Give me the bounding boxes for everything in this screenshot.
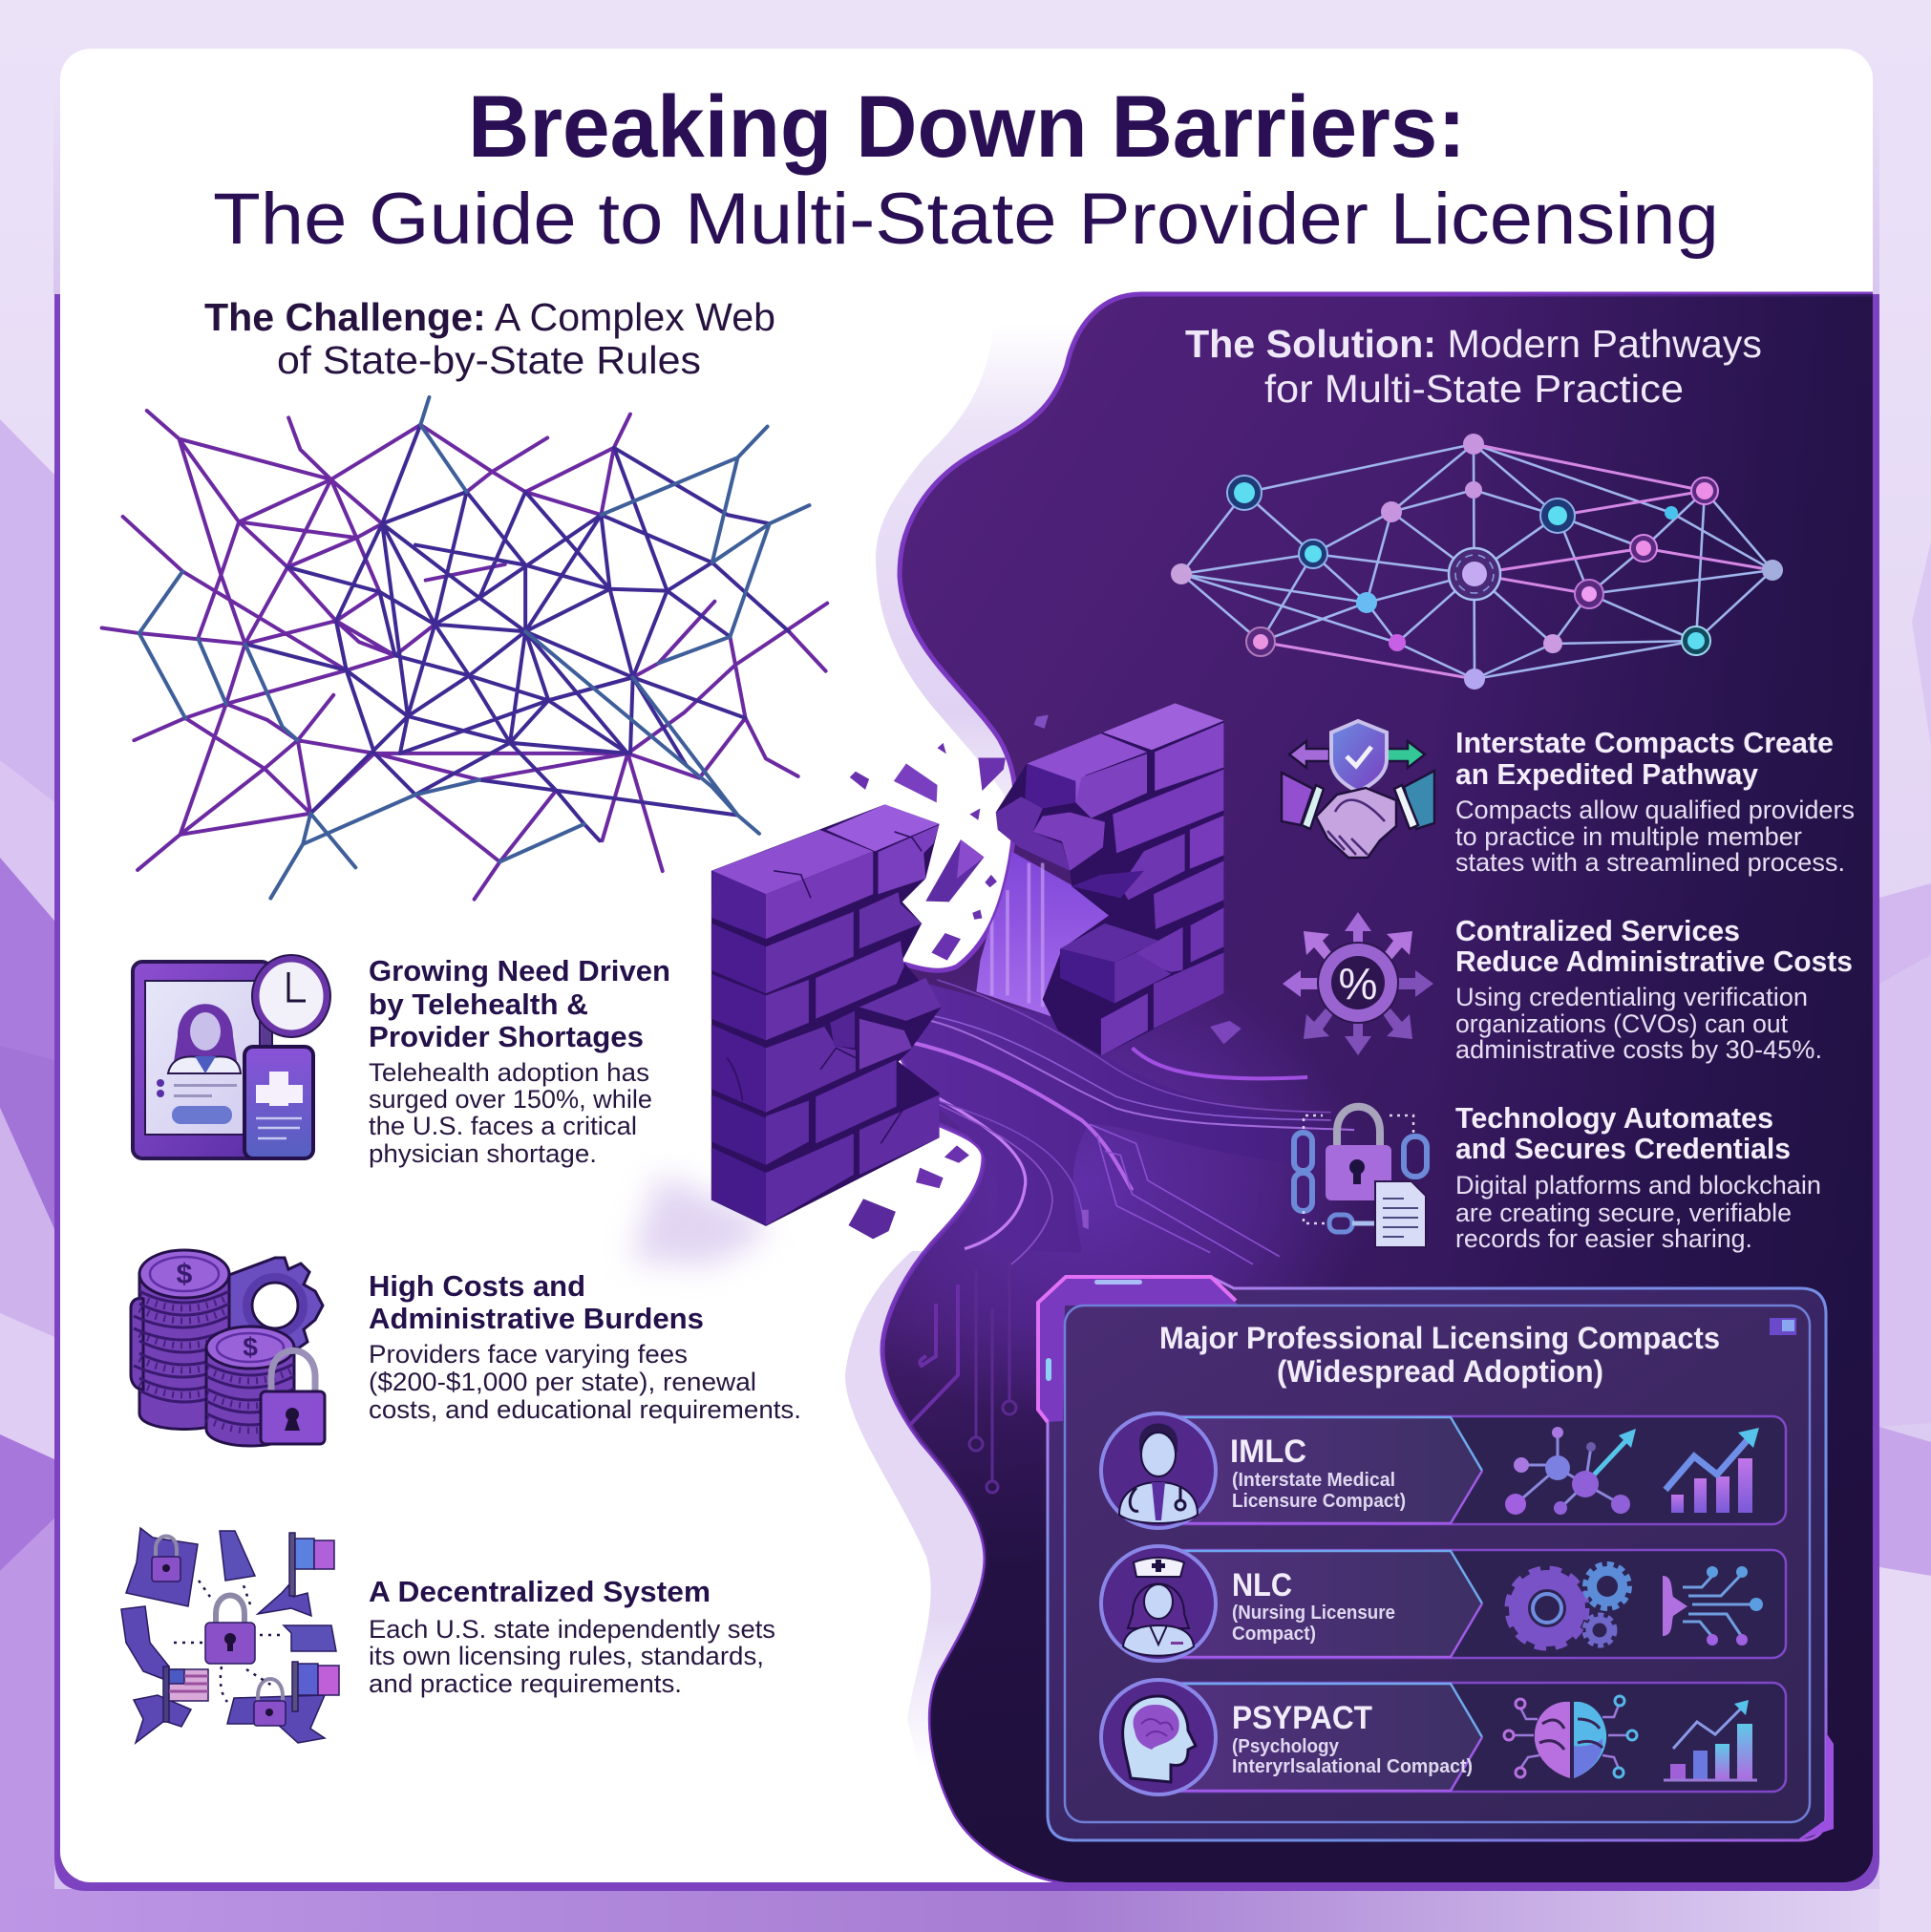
- panel heading: [1159, 1321, 1720, 1389]
- icon: percent with radiating arrows: %: [1339, 959, 1377, 1008]
- row: NLC: NLC: [1232, 1567, 1292, 1603]
- icon: handshake and shield: [1282, 721, 1434, 858]
- icon: percent with radiating arrows: [1283, 912, 1433, 1055]
- text: technology automates: are creating secure, verifiable: [1455, 1199, 1792, 1227]
- row: NLC: (Nursing Licensure: [1232, 1603, 1395, 1624]
- text: high costs: ($200-$1,000 per state), renewal: [369, 1368, 756, 1396]
- title: Breaking Down Barriers:: [468, 78, 1466, 176]
- icon: circuit connections: [1663, 1566, 1763, 1645]
- network diagram of modern pathways: [1171, 434, 1783, 690]
- floor shadow under wall: [630, 1175, 764, 1265]
- row: IMLC: (Interstate Medical: [1232, 1470, 1395, 1491]
- text: centralized services: Contralized Services: [1455, 914, 1740, 947]
- icon: decentralized state map with locks and flags: [121, 1528, 339, 1743]
- text: technology automates: records for easier sharing.: [1455, 1224, 1752, 1253]
- text: growing need: Growing Need Driven: [369, 954, 670, 987]
- tangled web chart of state rules: [102, 397, 827, 900]
- row: PSYPACT: [1101, 1680, 1786, 1794]
- icon: coin stacks, gear and lock: $: [177, 1259, 193, 1290]
- text: technology automates: Technology Automates: [1455, 1101, 1773, 1135]
- icon: bar chart with trend: [1664, 1700, 1757, 1780]
- dark solution panel wave: [793, 294, 1875, 1882]
- heading: the solution: for Multi-State Practice: [1264, 367, 1684, 411]
- text: decentralized system: A Decentralized System: [369, 1575, 711, 1608]
- lavender wave halo upper: [876, 353, 1068, 796]
- heading: the solution: The Solution: Modern Pathways: [1185, 322, 1762, 366]
- text: high costs: Administrative Burdens: [369, 1302, 704, 1335]
- text: centralized services: Using credentialing verification: [1455, 983, 1808, 1011]
- road and glowing opening behind broken wall: [899, 851, 1369, 1264]
- text: decentralized system: its own licensing rules, standards,: [369, 1642, 764, 1670]
- flying brick fragments: [848, 715, 1241, 1239]
- text: technology automates: [1455, 1101, 1821, 1253]
- row: PSYPACT: Interyrlsalational Compact): [1232, 1756, 1473, 1777]
- panel frame: [1038, 1277, 1834, 1841]
- panel heading: Major Professional Licensing Compacts: [1159, 1321, 1720, 1355]
- row: PSYPACT: PSYPACT: [1232, 1700, 1372, 1736]
- panel: major professional licensing compacts: [1038, 1277, 1834, 1841]
- text: growing need: surged over 150%, while: [369, 1085, 652, 1114]
- text: high costs: Providers face varying fees: [369, 1340, 688, 1369]
- heading: the challenge: The Challenge: A Complex Web: [204, 295, 775, 339]
- text: growing need: physician shortage.: [369, 1139, 597, 1168]
- text: decentralized system: and practice requirements.: [369, 1669, 682, 1698]
- icon: coin stacks, gear and lock: $: [243, 1332, 258, 1362]
- text: high costs: costs, and educational requirements.: [369, 1395, 801, 1424]
- text: interstate compacts: Compacts allow qualified providers: [1455, 796, 1855, 824]
- row: NLC: Compact): [1232, 1624, 1316, 1645]
- row: NLC: [1101, 1546, 1786, 1661]
- text: centralized services: Reduce Administrative Costs: [1455, 945, 1853, 978]
- circuit traces lower: [907, 1261, 1016, 1493]
- text: interstate compacts: an Expedited Pathway: [1455, 757, 1759, 791]
- panel heading: (Widespread Adoption): [1277, 1354, 1603, 1389]
- text: growing need: Telehealth adoption has: [369, 1058, 649, 1087]
- icon: telehealth tablet, clock and phone: [133, 955, 330, 1158]
- text: interstate compacts: to practice in multiple member: [1455, 822, 1802, 851]
- title: The Guide to Multi-State Provider Licensing: [213, 179, 1719, 260]
- text: growing need: Provider Shortages: [369, 1020, 644, 1053]
- text: centralized services: [1455, 914, 1853, 1064]
- text: decentralized system: Each U.S. state independently sets: [369, 1615, 775, 1644]
- text: high costs: [369, 1269, 801, 1424]
- row: IMLC: IMLC: [1230, 1433, 1306, 1470]
- title: [213, 78, 1719, 260]
- text: interstate compacts: states with a streamlined process.: [1455, 848, 1845, 877]
- broken brick wall: [711, 703, 1241, 1239]
- icon: network with arrow: [1505, 1427, 1636, 1515]
- row: IMLC: [1101, 1413, 1786, 1528]
- text: growing need: by Telehealth &: [369, 987, 588, 1021]
- circuit traces upper: [925, 482, 1178, 764]
- text: centralized services: administrative costs by 30-45%.: [1455, 1035, 1822, 1064]
- text: decentralized system: [369, 1575, 775, 1698]
- icon: growth chart: [1666, 1428, 1759, 1513]
- text: interstate compacts: Interstate Compacts Create: [1455, 726, 1834, 759]
- heading: the challenge: [204, 295, 775, 382]
- text: growing need: [369, 954, 670, 1168]
- right wall section: [996, 703, 1223, 1056]
- lavender wave halo lower: [845, 1251, 984, 1738]
- text: technology automates: Digital platforms and blockchain: [1455, 1171, 1821, 1200]
- text: centralized services: organizations (CVOs) can out: [1455, 1009, 1789, 1038]
- icon: brain circuits: [1504, 1696, 1637, 1778]
- heading: the challenge: of State-by-State Rules: [277, 338, 701, 382]
- text: high costs: High Costs and: [369, 1269, 585, 1303]
- icon: lock, chains and document: [1294, 1107, 1427, 1247]
- icon: gears: [1509, 1564, 1629, 1646]
- text: technology automates: and Secures Credentials: [1455, 1132, 1791, 1165]
- text: growing need: the U.S. faces a critical: [369, 1112, 637, 1140]
- text: interstate compacts: [1455, 726, 1855, 877]
- left wall section: [711, 804, 942, 1226]
- row: IMLC: Licensure Compact): [1232, 1491, 1406, 1512]
- icon: coin stacks, gear and lock: [131, 1250, 325, 1446]
- row: PSYPACT: (Psychology: [1232, 1736, 1340, 1757]
- heading: the solution: [1185, 322, 1762, 411]
